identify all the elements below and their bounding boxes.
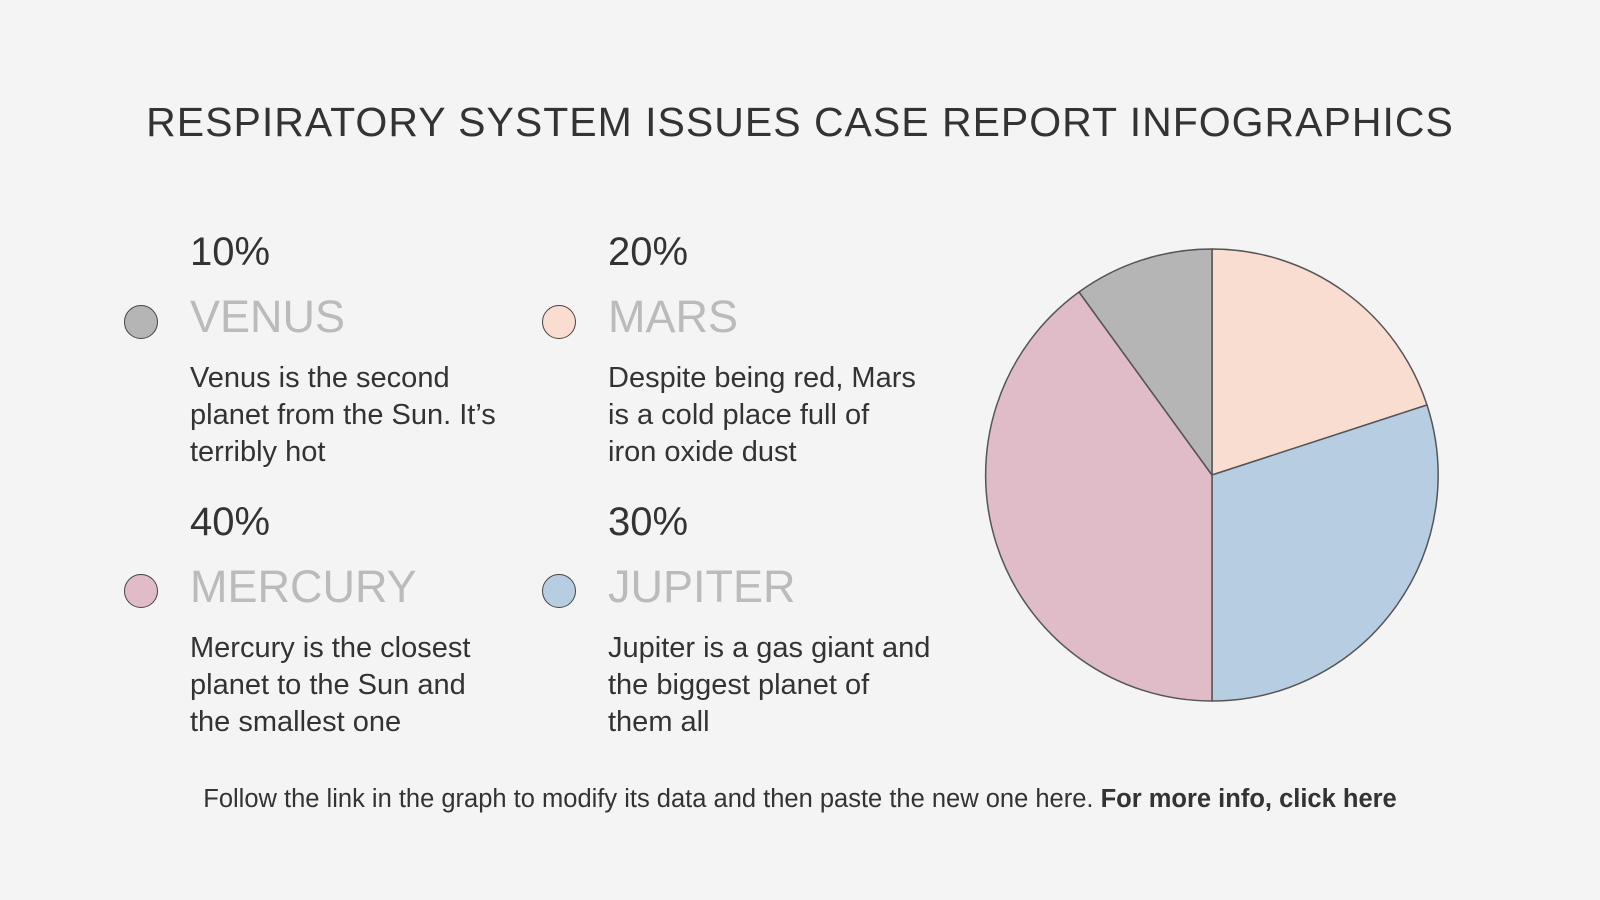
- title: RESPIRATORY SYSTEM ISSUES CASE REPORT INFOGRAPHICS: [146, 99, 1454, 145]
- text: mars: is a cold place full of: [608, 399, 869, 431]
- text: jupiter: Jupiter is a gas giant and: [608, 632, 930, 664]
- text: venus: [190, 362, 496, 468]
- item: mars: [542, 230, 916, 468]
- text: mercury: planet to the Sun and: [190, 669, 466, 701]
- text: mars: iron oxide dust: [608, 436, 797, 468]
- text: jupiter: them all: [608, 706, 710, 738]
- item: venus: [124, 230, 496, 468]
- text: mars: [608, 362, 916, 468]
- item: mercury: [124, 500, 470, 738]
- icon: jupiter dot: [542, 574, 576, 608]
- name: mercury: MERCURY: [190, 561, 417, 612]
- text: venus: Venus is the second: [190, 362, 450, 394]
- percent: jupiter: 30%: [608, 500, 688, 544]
- percent: mars: 20%: [608, 230, 688, 274]
- text: mars: Despite being red, Mars: [608, 362, 916, 394]
- icon: venus dot: [124, 305, 158, 339]
- icon: mercury dot: [124, 574, 158, 608]
- item: jupiter: [542, 500, 930, 738]
- name: venus: VENUS: [190, 291, 345, 342]
- name: jupiter: JUPITER: [608, 561, 796, 612]
- text: venus: terribly hot: [190, 436, 325, 468]
- name: mars: MARS: [608, 291, 738, 342]
- text: mercury: the smallest one: [190, 706, 401, 738]
- pie chart: [984, 248, 1439, 702]
- text: jupiter: the biggest planet of: [608, 669, 869, 701]
- percent: mercury: 40%: [190, 500, 270, 544]
- footer note: Follow the link in the graph to modify its data and then paste the new one here. For more info, click here: [203, 785, 1397, 813]
- text: jupiter: [608, 632, 930, 738]
- icon: mars dot: [542, 305, 576, 339]
- text: venus: planet from the Sun. It’s: [190, 399, 496, 431]
- text: mercury: [190, 632, 470, 738]
- percent: venus: 10%: [190, 230, 270, 274]
- text: mercury: Mercury is the closest: [190, 632, 470, 664]
